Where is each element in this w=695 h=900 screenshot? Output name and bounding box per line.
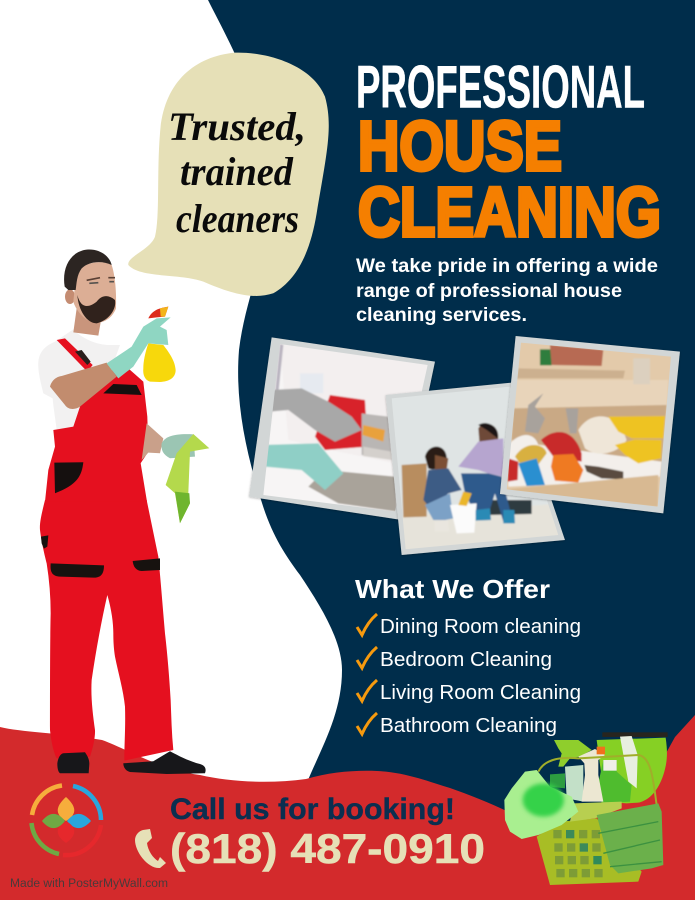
photo: gloved hands washing at sink (249, 337, 435, 520)
dustpan (597, 738, 667, 803)
cleaning basket (504, 732, 668, 885)
strap buckle (75, 350, 91, 365)
title (356, 54, 661, 251)
photo: dishes in kitchen sink (500, 336, 680, 513)
cleaner bib and straps (45, 338, 148, 502)
cleaner t-shirt (38, 329, 120, 429)
basket body (537, 818, 642, 885)
lower glove (161, 434, 195, 458)
intro text (356, 255, 658, 326)
cleaner head (64, 250, 116, 336)
spray bottles (550, 740, 632, 803)
basket handle (538, 755, 657, 805)
bubble shape (128, 53, 329, 296)
bubble text: trained (180, 149, 294, 194)
call to action: Call us for booking! (170, 793, 455, 826)
basket holes (553, 830, 603, 877)
cleaner knee patches (41, 535, 160, 578)
towel (597, 803, 663, 873)
offer item: bathroom: Bathroom Cleaning (380, 715, 557, 737)
offer list (355, 574, 581, 737)
cleaner raised arm (50, 363, 117, 409)
duster (504, 770, 578, 839)
phone number: (818) 487-0910 (170, 825, 485, 872)
spray bottle (143, 307, 176, 382)
photo: man and boy cleaning (386, 383, 565, 557)
lower arm (142, 423, 163, 460)
cleaner shoes (57, 751, 206, 774)
bubble text: Trusted, (168, 104, 306, 149)
cleaner trousers (40, 500, 173, 761)
cleaner figure (38, 250, 209, 774)
raised glove (107, 317, 171, 378)
title line: house: HOUSE (358, 107, 562, 185)
photo collage (249, 336, 680, 557)
logo (32, 786, 101, 855)
bib pocket (103, 384, 142, 395)
bubble text: cleaners (176, 196, 299, 241)
background: red footer wave (0, 715, 695, 900)
offer item: dining room: Dining Room cleaning (380, 616, 581, 638)
brush (620, 736, 638, 788)
icon: phone (135, 829, 166, 868)
watermark: Made with PosterMyWall.com (10, 878, 168, 890)
background: navy wave panel (208, 0, 695, 860)
sponge (570, 802, 622, 822)
intro text: cleaning services. (356, 304, 527, 326)
intro text: range of professional house (356, 280, 622, 302)
offer heading: What We Offer (355, 574, 550, 604)
offer item: bedroom: Bedroom Cleaning (380, 649, 552, 671)
speech bubble (128, 53, 329, 296)
bubble text (168, 104, 306, 241)
logo ring (32, 786, 101, 855)
hip pocket (54, 462, 83, 493)
cleaning cloth (166, 434, 209, 523)
offer item: living room: Living Room Cleaning (380, 682, 581, 704)
intro text: We take pride in offering a wide (356, 255, 658, 277)
logo petals (42, 797, 91, 843)
